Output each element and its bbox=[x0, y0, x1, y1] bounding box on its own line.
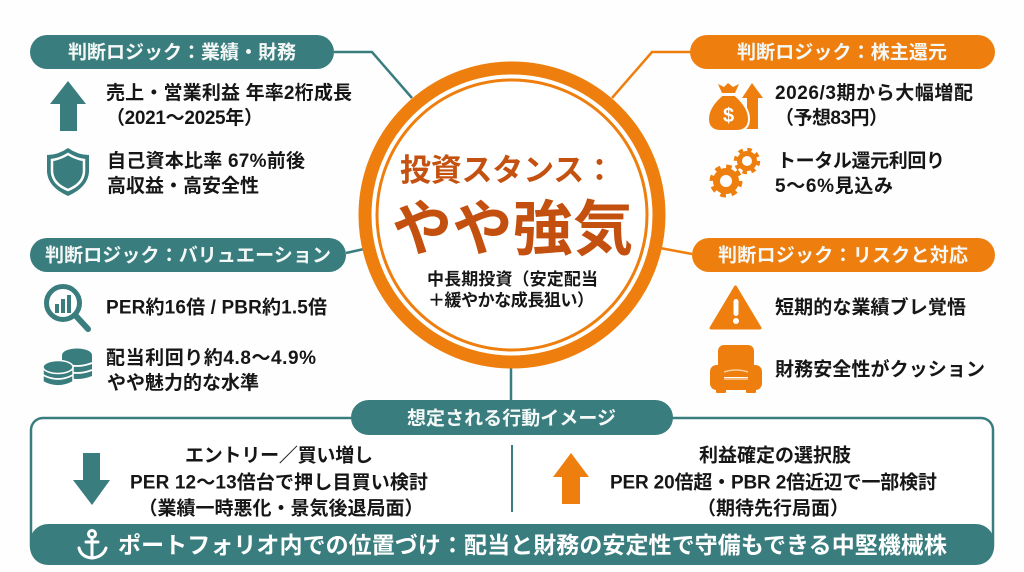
panel: portfolio position banner bbox=[30, 524, 994, 565]
text: equity ratio: 自己資本比率 67%前後 bbox=[107, 150, 305, 172]
icon: warning triangle bbox=[711, 287, 760, 328]
text: total return yield bbox=[775, 150, 945, 197]
text: financial cushion: 財務安全性がクッション bbox=[775, 358, 985, 380]
text: sales growth: 売上・営業利益 年率2桁成長 bbox=[106, 81, 352, 104]
connector lines bbox=[334, 52, 692, 402]
panel: expected actions bbox=[31, 400, 993, 558]
text: profit taking: （期待先行局面） bbox=[697, 498, 849, 520]
panel: risk and response logic bbox=[692, 238, 995, 393]
stance value: やや強気 bbox=[392, 196, 633, 263]
text: profit taking: PER 20倍超・PBR 2倍近辺で一部検討 bbox=[610, 472, 937, 494]
stance heading: 投資スタンス： bbox=[400, 153, 615, 188]
text: dividend yield: やや魅力的な水準 bbox=[107, 371, 259, 394]
text: total return yield: トータル還元利回り bbox=[777, 150, 945, 172]
heading pill: 判断ロジック：株主還元 bbox=[737, 42, 947, 64]
icon: magnifier with chart bbox=[46, 286, 88, 329]
text: profit taking: 利益確定の選択肢 bbox=[699, 444, 851, 466]
text: profit taking bbox=[610, 444, 937, 520]
text: dividend increase: （予想83円） bbox=[775, 107, 888, 129]
icon: coin stacks bbox=[43, 348, 92, 386]
text: dividend increase bbox=[775, 82, 973, 129]
panel: business and financial logic bbox=[30, 35, 352, 197]
icon: up arrow bbox=[50, 81, 86, 131]
icon: money bag with arrow: $ bbox=[723, 105, 734, 127]
heading pill bbox=[690, 35, 995, 69]
text: entry: （業績一時悪化・景気後退局面） bbox=[138, 498, 424, 520]
heading pill: 判断ロジック：バリュエーション bbox=[45, 244, 331, 266]
panel: valuation logic bbox=[30, 238, 346, 394]
text: dividend increase: 2026/3期から大幅増配 bbox=[775, 82, 973, 104]
panel: shareholder returns logic bbox=[690, 35, 995, 197]
icon: armchair bbox=[710, 345, 762, 393]
text: total return yield: 5～6%見込み bbox=[775, 175, 893, 197]
heading pill: 想定される行動イメージ bbox=[407, 408, 616, 430]
heading pill bbox=[30, 238, 346, 272]
icon: orange up arrow bbox=[553, 453, 589, 504]
heading pill bbox=[351, 400, 673, 435]
text: entry: エントリー／買い増し bbox=[185, 444, 373, 466]
heading pill bbox=[692, 238, 995, 272]
text: portfolio position: ポートフォリオ内での位置づけ：配当と財務の安定性で守備もできる中堅機械株 bbox=[118, 532, 947, 558]
text: entry bbox=[130, 444, 428, 520]
heading pill bbox=[30, 35, 334, 69]
text: sales growth bbox=[106, 81, 352, 129]
icon: down arrow bbox=[73, 453, 110, 505]
stance description bbox=[427, 270, 598, 310]
text: dividend yield: 配当利回り約4.8～4.9% bbox=[106, 347, 316, 369]
text: equity ratio: 高収益・高安全性 bbox=[107, 175, 259, 197]
text: sales growth: （2021～2025年） bbox=[106, 106, 263, 129]
icon: shield bbox=[47, 148, 89, 196]
stance description: 中長期投資（安定配当 bbox=[427, 270, 598, 289]
text: equity ratio bbox=[107, 150, 305, 197]
text: PER and PBR: PER約16倍 / PBR約1.5倍 bbox=[106, 296, 327, 318]
heading pill: 判断ロジック：業績・財務 bbox=[68, 42, 296, 64]
text: short-term volatility: 短期的な業績ブレ覚悟 bbox=[775, 296, 966, 318]
heading pill: 判断ロジック：リスクと対応 bbox=[718, 244, 968, 266]
text: entry: PER 12～13倍台で押し目買い検討 bbox=[130, 472, 428, 494]
stance description: ＋緩やかな成長狙い） bbox=[428, 290, 594, 310]
text: dividend yield bbox=[106, 347, 316, 394]
icon: anchor bbox=[79, 530, 106, 558]
icon: money bag with arrow bbox=[708, 83, 763, 131]
panel: central stance circle bbox=[365, 68, 659, 362]
icon: gears bbox=[712, 150, 758, 196]
